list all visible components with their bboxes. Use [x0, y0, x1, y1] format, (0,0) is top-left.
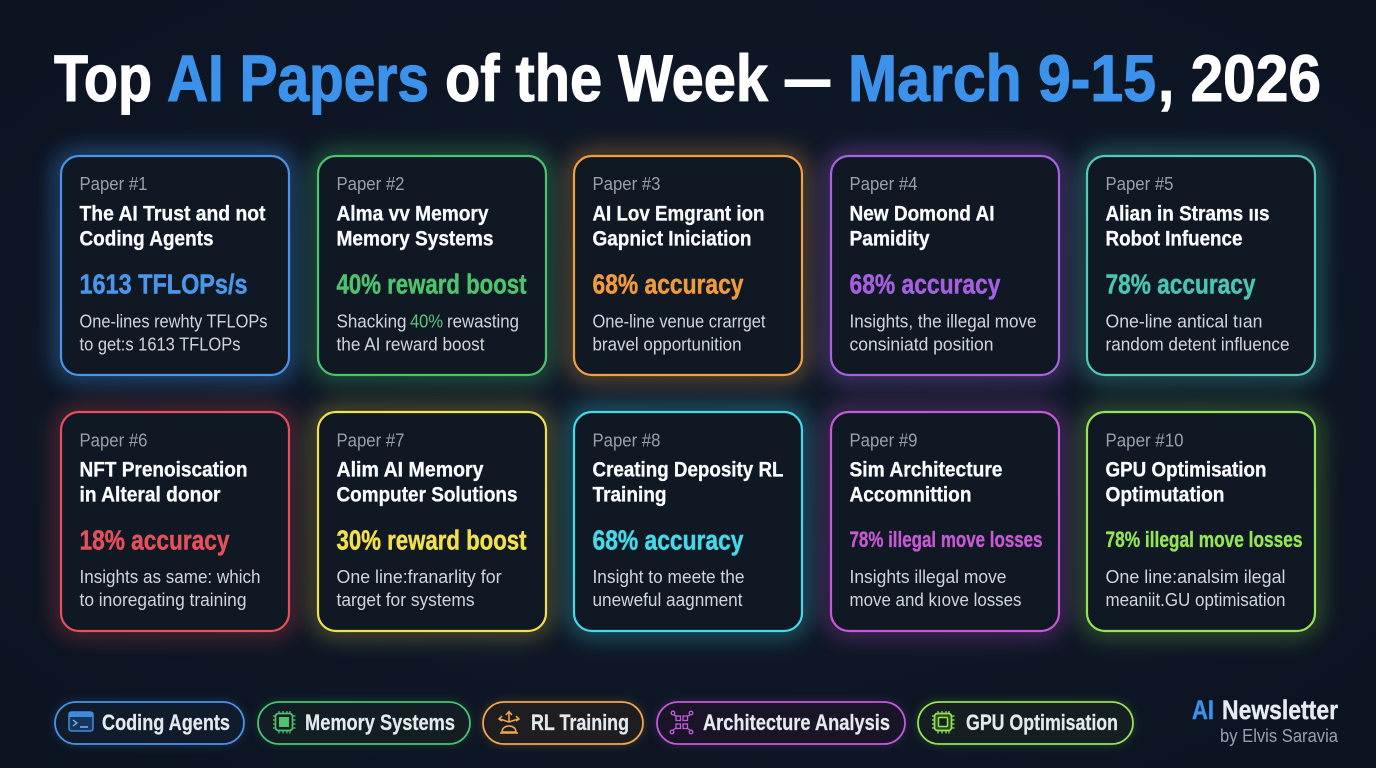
legend pill: memory systems — [258, 702, 470, 744]
title: , 2026 — [1158, 41, 1321, 115]
metric: 68% accuracy — [850, 268, 1001, 300]
description: meaniit.GU optimisation — [1106, 589, 1286, 610]
description: target for systems — [336, 589, 474, 610]
paper number: Paper #8 — [592, 430, 660, 450]
paper number: Paper #4 — [850, 174, 918, 194]
paper number: Paper #7 — [336, 430, 404, 450]
description: rewasting — [447, 310, 519, 332]
paper title: Alim AI Memory — [336, 458, 484, 482]
paper title: Pamidity — [850, 226, 930, 250]
metric: 78% accuracy — [1106, 268, 1256, 300]
metric: 1613 TFLOPs/s — [80, 268, 248, 300]
panel: paper 5 — [1087, 156, 1315, 375]
paper number: Paper #3 — [592, 174, 660, 194]
description: to get:s 1613 TFLOPs — [80, 334, 240, 354]
description: One line:analsim ilegal — [1106, 566, 1286, 587]
newsletter branding: AI — [1192, 695, 1214, 725]
panel: paper 6 — [61, 412, 289, 631]
panel: paper 10 — [1087, 412, 1315, 631]
metric: 68% accuracy — [592, 524, 744, 556]
icon: memory chip — [273, 711, 296, 734]
title: of the Week — [445, 41, 768, 115]
legend pill: architecture analysis — [657, 702, 905, 744]
paper title: Training — [592, 482, 666, 506]
panel: paper 9 — [831, 412, 1059, 631]
panel: paper 8 — [574, 412, 802, 631]
paper title: Alian in Strams ııs — [1106, 202, 1270, 226]
panel: paper 7 — [318, 412, 546, 631]
label: Memory Systems — [305, 710, 455, 735]
label: Coding Agents — [102, 710, 230, 735]
panel: paper 3 — [574, 156, 802, 375]
title: March 9-15 — [848, 41, 1156, 115]
paper title: Sim Architecture — [850, 458, 1003, 482]
description: the AI reward boost — [336, 334, 484, 354]
legend pill: rl training — [483, 702, 643, 744]
panel: paper 2 — [318, 156, 546, 375]
title — [54, 41, 1321, 115]
legend pill: coding agents — [55, 702, 244, 744]
description: Insights illegal move — [850, 566, 1006, 587]
title: AI Papers — [167, 41, 429, 115]
label: RL Training — [531, 710, 629, 735]
description: One line:franarlity for — [336, 566, 502, 587]
label: GPU Optimisation — [966, 710, 1118, 735]
paper title: Alma vv Memory — [336, 202, 489, 226]
paper title: Gapnict Iniciation — [592, 226, 752, 250]
description: Insight to meete the — [592, 566, 744, 587]
newsletter branding: Newsletter — [1222, 695, 1338, 725]
paper title: Coding Agents — [80, 226, 214, 250]
paper number: Paper #9 — [850, 430, 918, 450]
newsletter branding: by Elvis Saravia — [1220, 725, 1339, 746]
paper title: The AI Trust and not — [80, 202, 266, 226]
paper title: New Domond AI — [850, 202, 994, 226]
metric: 30% reward boost — [336, 524, 526, 556]
description: Insights as same: which — [80, 566, 260, 587]
paper number: Paper #2 — [336, 174, 404, 194]
description: move and kıove losses — [850, 589, 1022, 610]
metric: 40% reward boost — [336, 268, 526, 300]
metric: 78% illegal move losses — [850, 527, 1042, 552]
icon: network graph — [670, 711, 693, 734]
metric: 18% accuracy — [80, 524, 230, 556]
paper title: AI Lov Emgrant ion — [592, 202, 764, 226]
label: Architecture Analysis — [703, 710, 890, 735]
description: Insights, the illegal move — [850, 310, 1036, 332]
metric: 68% accuracy — [592, 268, 744, 300]
paper number: Paper #1 — [80, 174, 148, 194]
description: One-line antical tıan — [1106, 310, 1262, 332]
title: Top — [54, 41, 152, 115]
description: 40% — [410, 310, 443, 332]
icon: branching arrows — [499, 712, 519, 733]
paper number: Paper #5 — [1106, 174, 1174, 194]
paper title: Computer Solutions — [336, 482, 518, 506]
description: bravel opportunition — [592, 334, 742, 354]
paper title: Memory Systems — [336, 226, 494, 250]
newsletter branding — [1192, 695, 1339, 746]
paper title: Accomnittion — [850, 482, 972, 506]
paper title: GPU Optimisation — [1106, 458, 1266, 482]
description: Shacking — [336, 310, 406, 332]
paper number: Paper #6 — [80, 430, 148, 450]
paper number: Paper #10 — [1106, 430, 1184, 450]
description: One-lines rewhty TFLOPs — [80, 310, 268, 332]
legend pill: gpu optimisation — [918, 702, 1133, 744]
description: consiniatd position — [850, 334, 994, 354]
metric: 78% illegal move losses — [1106, 527, 1302, 552]
paper title: Creating Deposity RL — [592, 458, 784, 482]
panel: paper 1 — [61, 156, 289, 375]
panel: paper 4 — [831, 156, 1059, 375]
paper title: Robot Infuence — [1106, 226, 1243, 250]
paper title: Optimutation — [1106, 482, 1224, 506]
paper title: NFT Prenoiscation — [80, 458, 248, 482]
description: to inoregating training — [80, 589, 246, 610]
description — [336, 310, 519, 354]
icon: gpu chip — [932, 711, 954, 734]
description: uneweful aagnment — [592, 589, 742, 610]
description: random detent influence — [1106, 334, 1290, 354]
title: — — [785, 41, 830, 115]
icon: terminal — [69, 712, 93, 731]
description: One-line venue crarrget — [592, 310, 766, 332]
paper title: in Alteral donor — [80, 482, 221, 506]
